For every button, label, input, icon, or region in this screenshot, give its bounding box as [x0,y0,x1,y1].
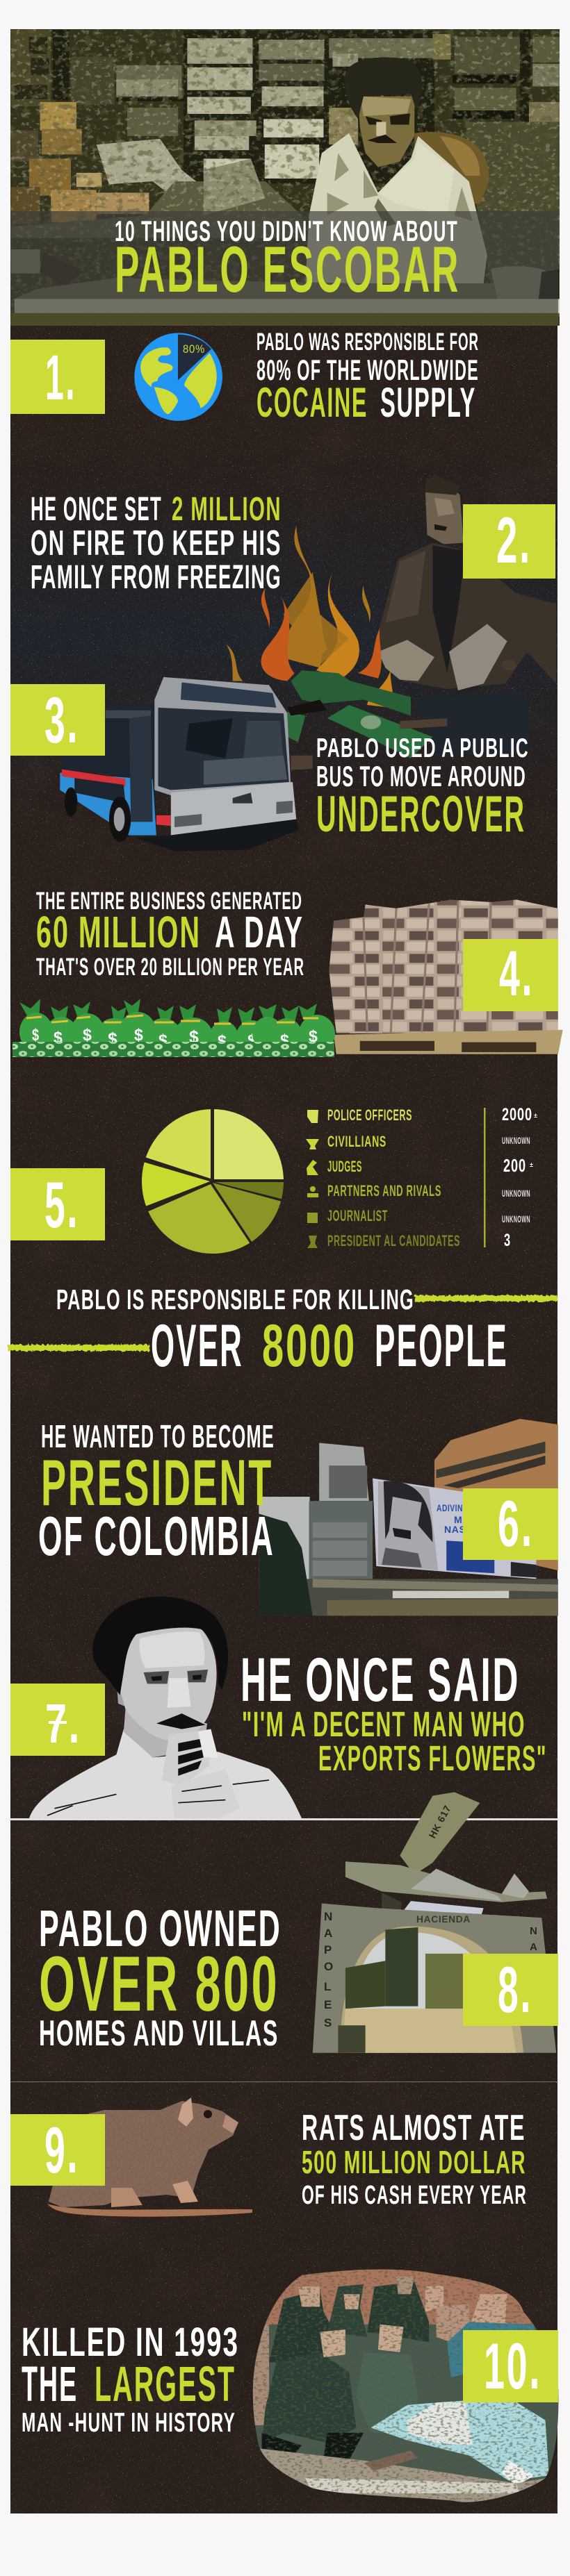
icon: partners [307,1186,318,1197]
money bag 2: $ [54,1029,63,1047]
money bag 3: $ [83,1026,92,1045]
icon: police [307,1110,318,1123]
gate lettering [324,1803,538,2029]
loose bills strip [13,1042,334,1057]
gate lettering: L [324,1980,332,1993]
money bag 8 [209,1007,238,1054]
gate lettering: HACIENDA [416,1913,471,1925]
killed-by legend [306,1106,460,1249]
gate lettering: A [324,1927,333,1940]
money bag 4: $ [108,1029,118,1049]
fact 6 square number [463,1487,558,1560]
legend divider [484,1108,485,1247]
fact 7 portrait with microphone [29,1597,302,1818]
money bag 5: $ [134,1026,144,1045]
money bag 1: $ [32,1026,40,1045]
fact 2 text: FAMILY FROM FREEZING [31,559,282,596]
fact 5 text: OVER [151,1313,243,1379]
fact 8 text: HOMES AND VILLAS [39,2013,279,2054]
fact 5 text [56,1283,508,1379]
money bag 7 [174,1004,213,1055]
fact 2 square number [463,504,555,579]
gate lettering: O [324,1960,334,1973]
fact 2 text: HE ONCE SET [31,491,162,528]
fact 10 text: LARGEST [95,2357,236,2412]
money bag 6 [145,1006,181,1054]
money bag 11 [270,1006,302,1054]
fact 1 text [256,329,479,426]
fact 6 square number: 6. [498,1487,534,1560]
legend values: ± [530,1161,533,1168]
legend values: UNKNOWN [502,1213,530,1224]
fact 2 illustration: man burning money [226,475,556,770]
money bag 7: $ [189,1027,200,1047]
fact 10 text [22,2320,239,2438]
fact 4 text: 60 MILLION [36,907,201,957]
fact 9 square number: 9. [44,2113,79,2186]
killed-by legend: PARTNERS AND RIVALS [327,1182,441,1199]
plane [345,1792,547,1916]
fact 4 square number: 4. [499,938,534,1009]
fact 3 text [316,733,529,842]
billboard slogan: ADIVIN [437,1502,463,1513]
icon: judge gavel [307,1160,318,1175]
gate lettering: N [324,1910,333,1923]
fact 5 square number: 5. [44,1168,79,1241]
fact 7 square number: 7. [45,1693,81,1754]
money bag 3 [71,1002,104,1051]
gate arch [313,1904,556,2053]
Pablo seated figure [11,58,560,326]
fact 10 text: KILLED IN 1993 [22,2320,239,2365]
money bag 1 [19,999,53,1052]
legend values [502,1105,537,1250]
title [115,215,460,306]
money bag 12 [299,1004,335,1052]
title backing band [10,211,558,313]
legend values: UNKNOWN [502,1188,530,1199]
legend values: 200 [503,1155,526,1176]
billboard slogan [437,1502,470,1535]
fire flames [226,526,393,708]
fact 8 text [39,1900,282,2054]
fact 1 square number: 1. [45,342,76,413]
fact 9 text [302,2108,527,2210]
fact 8 text: OVER 800 [39,1941,279,2027]
fact 1 text: SUPPLY [380,379,476,426]
fact 10 square number [463,2329,558,2402]
money bags row [13,999,335,1057]
icon: candidate chess piece [307,1236,318,1248]
fact 3 square number: 3. [44,683,79,756]
money bag 2 [44,1006,78,1053]
money bag 6: $ [158,1031,168,1050]
icon: journalist book [307,1213,318,1223]
fact 6 text: HE WANTED TO BECOME [41,1418,275,1454]
billboard slogan: MA [454,1514,470,1525]
section divider [10,1818,557,1820]
gate lettering: N [530,1925,538,1937]
fact 4 text: THAT'S OVER 20 BILLION PER YEAR [36,954,304,981]
legend values: 3 [504,1231,511,1250]
fact 5 pie chart [142,1109,284,1254]
fact 4 illustration: pallet of cash bricks [329,899,563,1054]
man warming hands [378,475,556,758]
fact 10 text: MAN -HUNT IN HISTORY [22,2408,236,2438]
fact 10 photograph: soldiers with Pablo's body [247,2266,560,2509]
billboard slogan: NAS [444,1524,466,1535]
icon: civilians [306,1139,319,1149]
fact 4 text: THE ENTIRE BUSINESS GENERATED [36,888,302,915]
money bag 8: $ [218,1032,227,1051]
money bag 5 [120,999,156,1049]
money bag 4 [96,1006,132,1054]
fact 4 text [36,888,304,981]
money bag 11: $ [280,1031,290,1050]
fact 7 text [241,1645,547,1778]
globe 80 percent label: 80% [183,342,205,356]
killed-by legend: JUDGES [327,1158,362,1175]
fact 2 square number: 2. [496,504,532,576]
legend values: UNKNOWN [502,1135,530,1146]
fact 8 square number: 8. [498,1953,532,2026]
killed-by legend: POLICE OFFICERS [327,1106,412,1124]
gate lettering: S [324,2016,332,2029]
money bag 9 [236,1007,268,1055]
fact 10 text: THE [22,2357,78,2412]
killed-by legend: PRESIDENT AL CANDIDATES [327,1232,460,1249]
fact 4 text: A DAY [215,907,304,957]
fact 1 text: COCAINE [256,379,368,426]
legend values: ± [534,1112,537,1119]
gate lettering: E [324,1998,332,2011]
fact 2 text: ON FIRE TO KEEP HIS [31,523,282,563]
killed-by legend: CIVILLIANS [327,1133,386,1150]
fact 9 square number [10,2113,105,2186]
fact 5 square number [10,1168,105,1241]
section divider [10,2081,557,2082]
hero background shelves and boxes [10,29,560,326]
hero photo: Pablo at desk with shelves of cash [10,29,560,326]
fact 8 text: PABLO OWNED [39,1900,282,1957]
burning money bundles [287,670,447,770]
fact 8 square number [463,1953,558,2026]
fact 6 text: PRESIDENT [41,1446,273,1519]
fact 2 text: 2 MILLION [172,491,282,528]
fact 8 illustration: plane on Hacienda Napoles gate [313,1792,556,2053]
money bag 12: $ [309,1027,318,1046]
money bag 9: $ [247,1031,258,1050]
money bag 10 [252,1004,283,1050]
gate lettering: A [530,1941,538,1953]
fact 5 text: 8000 [262,1313,357,1379]
fact 6 text: OF COLOMBIA [38,1505,275,1567]
killed-by legend: JOURNALIST [327,1207,388,1224]
icon: globe 80 percent [134,333,222,421]
fact 6 text [38,1418,275,1567]
fact 3 illustration: public bus [60,677,299,851]
fact 2 text [31,491,282,596]
torn lime accent strokes [8,1295,557,1351]
fact 4 square number [463,938,558,1011]
fact 6 illustration: buildings and billboard [259,1419,558,1615]
fact 7 square number [10,1684,105,1756]
gate lettering: P [324,1943,332,1956]
gate lettering: HK 617 [427,1803,453,1840]
fact 3 square number [10,683,105,756]
fact 1 square number [10,340,105,414]
fact 9 illustration: rat [47,2097,252,2217]
legend values: 2000 [502,1105,532,1124]
